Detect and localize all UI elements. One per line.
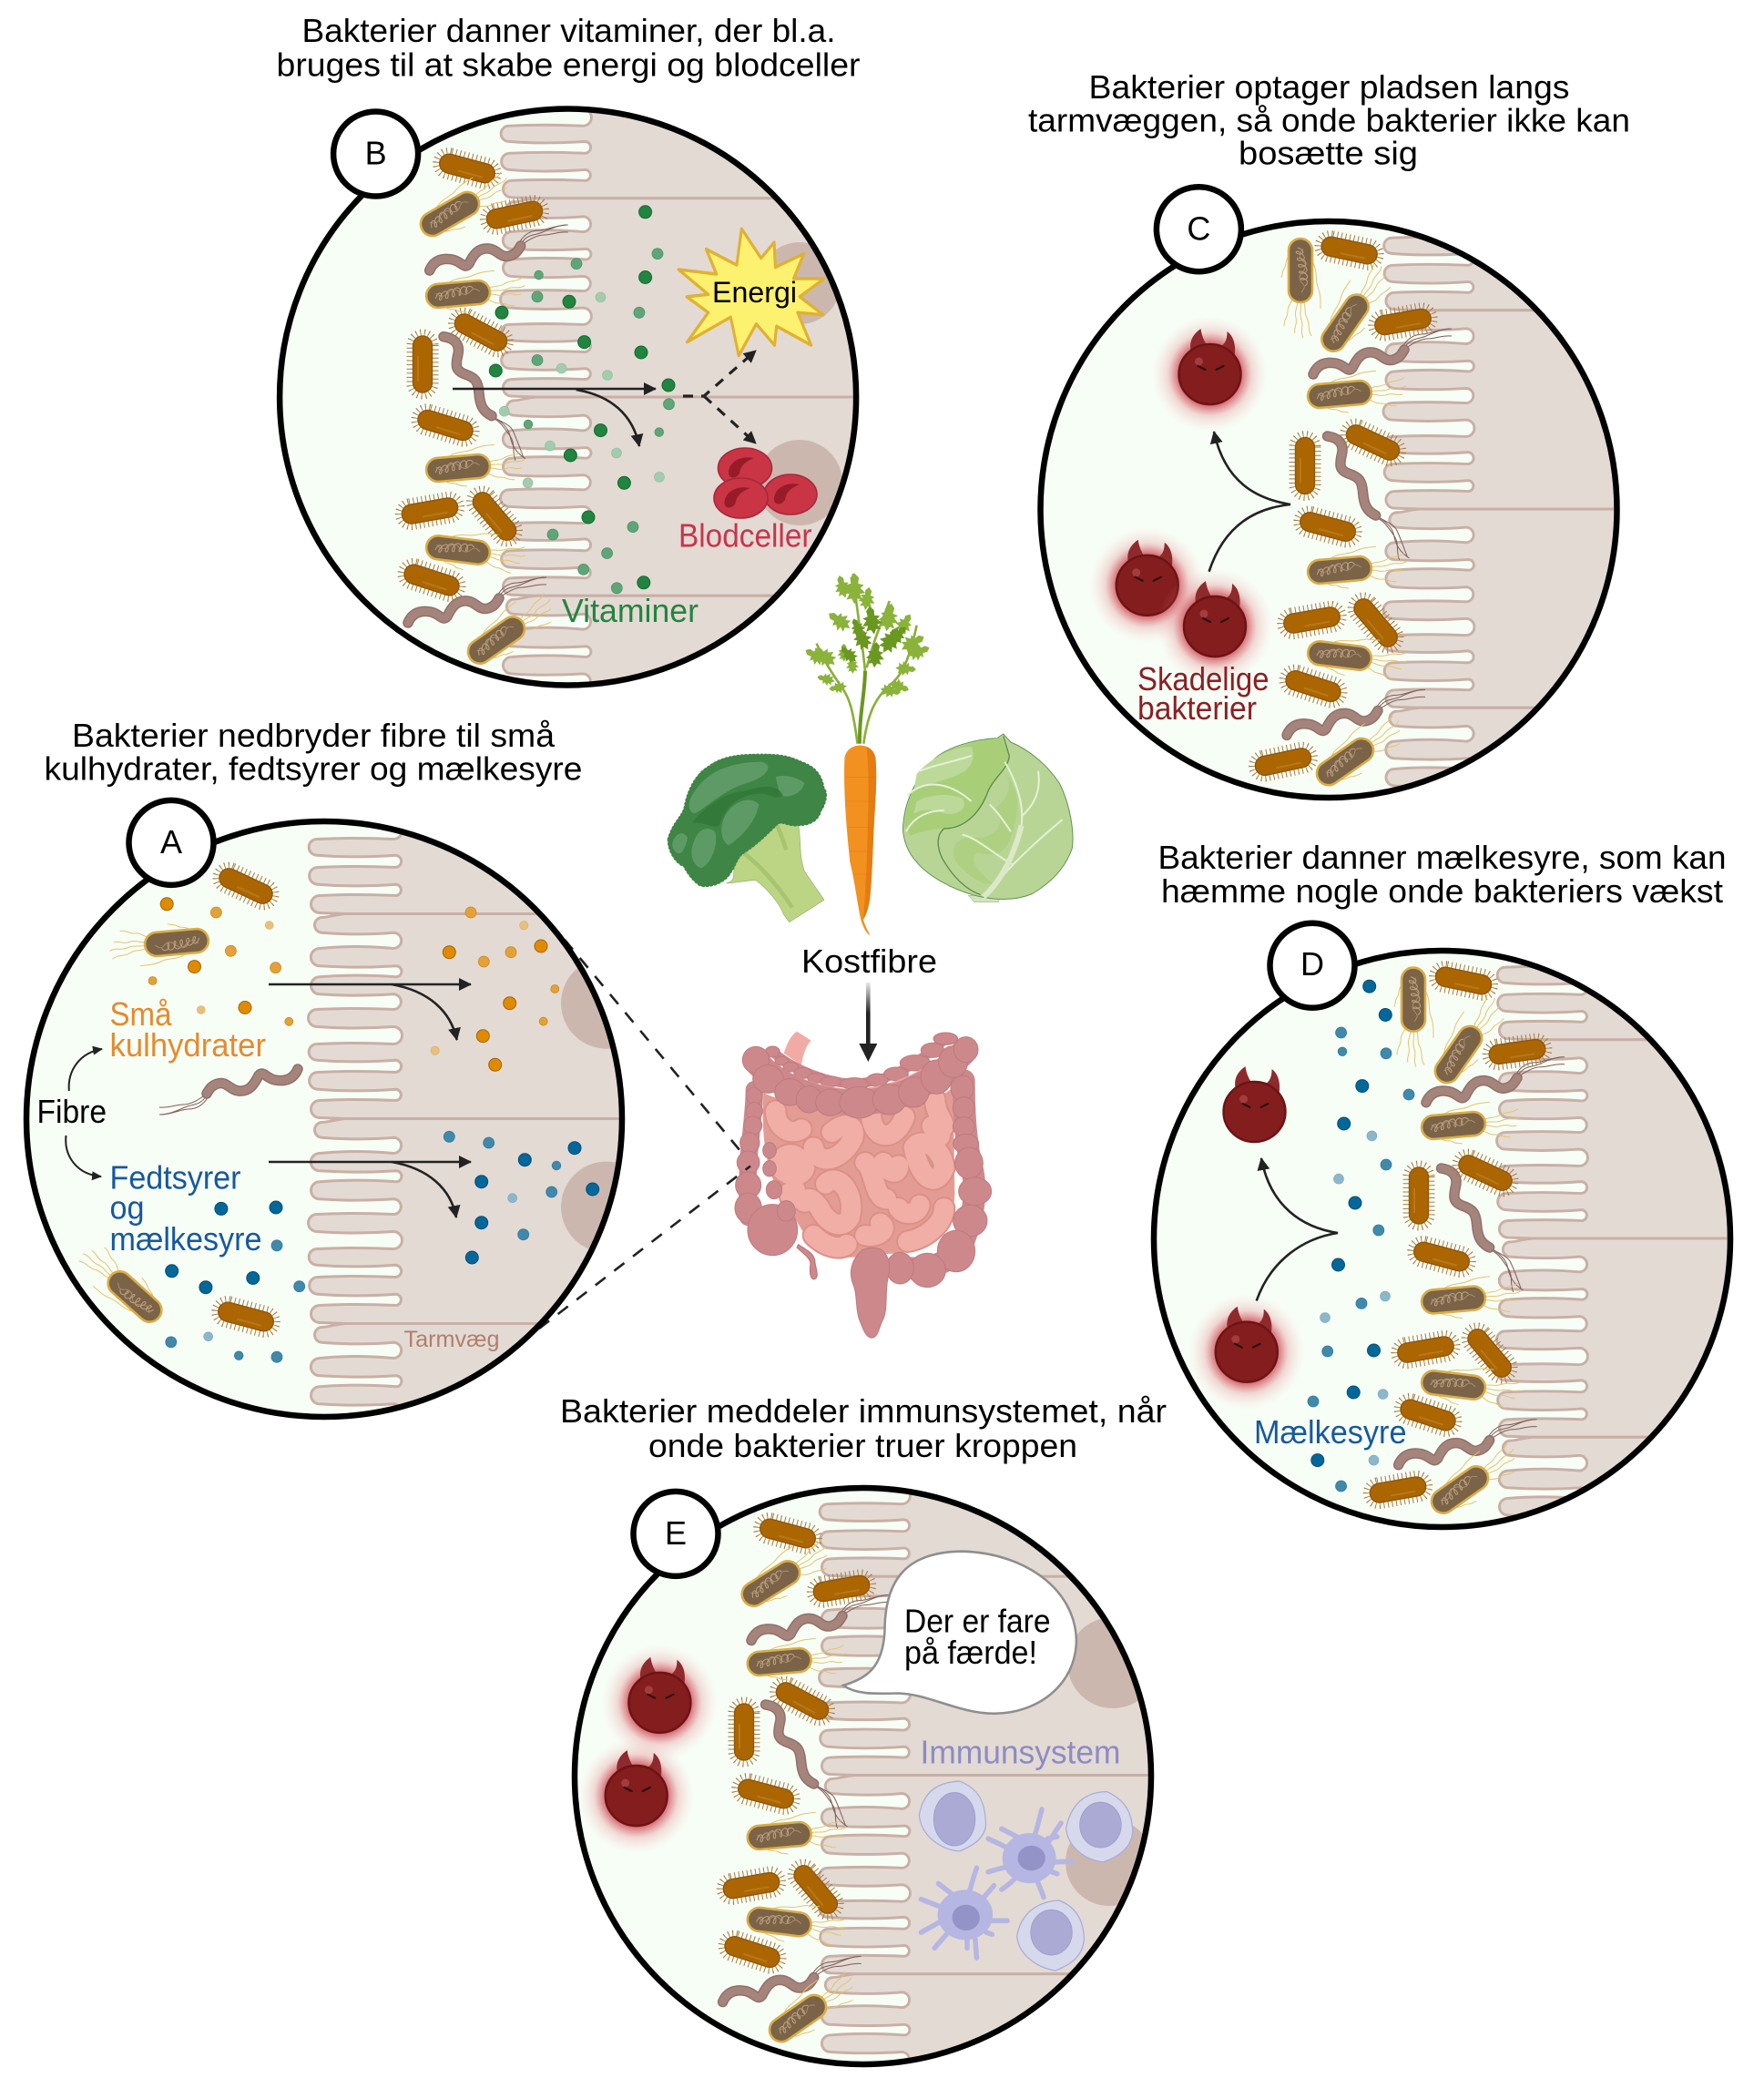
label: Tarmvæg: Tarmvæg	[404, 1327, 499, 1352]
intestinal wall C	[1382, 236, 1614, 787]
badge E: E	[665, 1514, 687, 1552]
icon: energy star	[678, 229, 824, 356]
icon: cabbage	[903, 734, 1073, 902]
heading: D: Bakterier danner mælkesyre, som kan	[1158, 839, 1727, 876]
orange dots	[148, 898, 559, 1071]
badge A	[129, 800, 213, 885]
arrow C	[1209, 432, 1290, 572]
heading: E	[560, 1392, 1167, 1464]
heading: C: tarmvæggen, så onde bakterier ikke kan	[1028, 102, 1630, 139]
heading: Kostfibre: Kostfibre	[801, 942, 937, 980]
badge B: B	[365, 135, 387, 171]
heading: D	[1158, 839, 1727, 910]
blue dots D	[1308, 980, 1414, 1492]
icon: carrot	[801, 573, 933, 935]
tissue patches B	[757, 242, 842, 525]
labels A: Fibre	[36, 1093, 107, 1130]
intestinal wall A	[307, 834, 619, 1407]
panel: B	[277, 106, 860, 688]
heading: A: kulhydrater, fedtsyrer og mælkesyre	[44, 750, 583, 787]
panel: C	[1037, 184, 1620, 801]
green dots	[489, 206, 675, 594]
icon: red blood cells	[714, 448, 817, 518]
label: Skadelige bakterier: Skadelige	[1137, 660, 1269, 698]
heading: A	[44, 717, 583, 787]
harmful bacteria C	[1089, 316, 1273, 685]
badge C	[1157, 187, 1241, 271]
labels A: Små	[109, 995, 172, 1033]
blue dots	[166, 1131, 599, 1362]
arrow D	[1257, 1158, 1338, 1300]
heading: D: hæmme nogle onde bakteriers vækst	[1161, 872, 1723, 910]
labels B: Vitaminer	[562, 592, 698, 629]
label: Skadelige bakterier	[1137, 660, 1269, 727]
badge A: A	[160, 823, 182, 861]
panel: A	[24, 798, 625, 1421]
badge B	[333, 111, 418, 197]
heading: B	[277, 12, 860, 84]
heading: C	[1028, 68, 1630, 171]
label: Mælkesyre: Mælkesyre	[1254, 1413, 1406, 1451]
harmful bacteria D	[1194, 1066, 1299, 1404]
heading: E: Bakterier meddeler immunsystemet, når	[560, 1392, 1167, 1430]
labels A: og	[109, 1189, 144, 1227]
speech bubble	[843, 1552, 1076, 1714]
heading: B: bruges til at skabe energi og blodceller	[277, 46, 860, 84]
arrow: kostfibre to gut	[859, 983, 877, 1062]
icon: broccoli	[669, 756, 825, 922]
intestinal wall E	[818, 1494, 1148, 2058]
arrows A	[66, 984, 471, 1217]
labels A: Fedtsyrer	[109, 1158, 240, 1197]
labels B	[562, 276, 812, 629]
dashed zoom lines	[539, 940, 750, 1329]
heading: C: Bakterier optager pladsen langs	[1089, 68, 1570, 106]
badge D: D	[1300, 945, 1324, 983]
heading: E: onde bakterier truer kroppen	[648, 1427, 1077, 1464]
immune cells	[919, 1781, 1133, 1971]
heading: A: Bakterier nedbryder fibre til små	[72, 717, 556, 754]
labels E	[904, 1603, 1120, 1771]
badge D	[1269, 923, 1355, 1008]
icon: intestines	[735, 1032, 992, 1338]
labels B: Blodceller	[678, 517, 812, 554]
harmful bacteria E	[584, 1650, 712, 1849]
label: Skadelige bakterier: bakterier	[1137, 689, 1257, 727]
panel: D	[1151, 920, 1734, 1530]
intestinal wall B	[499, 113, 853, 681]
labels A: mælkesyre	[109, 1220, 262, 1258]
labels E: Immunsystem	[920, 1734, 1120, 1771]
labels A	[36, 995, 266, 1258]
labels A: kulhydrater	[109, 1026, 266, 1064]
badge E	[634, 1492, 718, 1576]
labels E: på færde!	[904, 1634, 1037, 1671]
arrows B	[453, 351, 756, 446]
labels E: Der er fare	[904, 1603, 1051, 1639]
badge C: C	[1187, 209, 1210, 248]
intestinal wall D	[1495, 965, 1728, 1517]
tissue patches A	[561, 969, 616, 1249]
heading: C: bosætte sig	[1239, 135, 1418, 171]
labels B: Energi	[712, 276, 797, 309]
heading: B: Bakterier danner vitaminer, der bl.a.	[302, 12, 836, 49]
tissue patches E	[1066, 1619, 1142, 1906]
panel: E	[572, 1484, 1155, 2067]
